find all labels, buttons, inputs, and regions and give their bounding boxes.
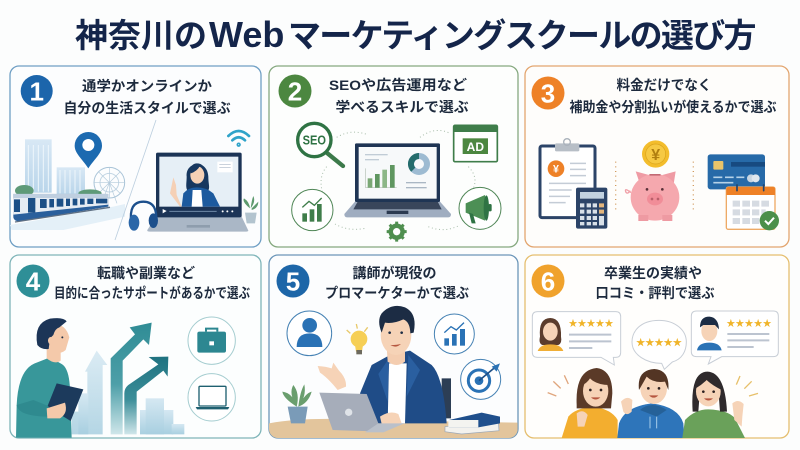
heading 4 bbox=[54, 265, 250, 301]
heading 3: 料金だけでなく bbox=[616, 77, 712, 93]
instructor bbox=[318, 306, 451, 424]
city skyline bbox=[72, 351, 184, 434]
icon: laptop circle bbox=[188, 374, 235, 421]
heading 1 bbox=[64, 78, 230, 116]
panel 6: reviews bbox=[525, 255, 789, 438]
heading 1: 通学かオンラインか bbox=[82, 78, 212, 94]
arrow: upper growth bbox=[111, 323, 152, 434]
icon: yen coin bbox=[642, 140, 669, 168]
icon: megaphone circle bbox=[459, 187, 501, 229]
number badge 2 bbox=[278, 74, 312, 108]
title: 神奈川の bbox=[75, 17, 207, 54]
heading 6 bbox=[596, 265, 714, 301]
icon: target circle bbox=[461, 359, 501, 399]
icon: clipboard with calculator: ¥ bbox=[553, 164, 559, 176]
icon: gear bbox=[387, 222, 407, 242]
heading 5 bbox=[325, 265, 469, 301]
illustration: graduates and reviews bbox=[532, 311, 778, 438]
illustration: career paths bbox=[16, 317, 235, 438]
icon: AD window: AD bbox=[467, 140, 484, 154]
heading 1: 自分の生活スタイルで選ぶ bbox=[64, 100, 230, 116]
number badge 5 bbox=[276, 264, 310, 298]
graduate center bbox=[617, 369, 684, 438]
heading 5: プロマーケターかで選ぶ bbox=[325, 285, 469, 301]
review bubble center bbox=[632, 320, 686, 369]
graduate right bbox=[682, 372, 745, 438]
icon: wifi bbox=[228, 131, 249, 145]
illustration: laptop with online teacher bbox=[147, 153, 248, 232]
number badge 1: 1 bbox=[29, 76, 44, 106]
heading 6: 口コミ・評判で選ぶ bbox=[596, 285, 714, 301]
icon: clipboard with calculator bbox=[540, 139, 607, 229]
icon: light bulb bbox=[347, 324, 368, 354]
panel 2: skills bbox=[269, 66, 518, 247]
heading 2: SEOや広告運用など bbox=[329, 77, 467, 93]
panel 5: active marketers bbox=[269, 255, 518, 438]
icon: potted plant bbox=[243, 196, 258, 223]
icon: yen coin: ¥ bbox=[651, 147, 660, 164]
review bubble right bbox=[691, 311, 778, 364]
illustration: city and train bbox=[10, 120, 258, 240]
laptop bbox=[319, 393, 404, 432]
arrow: lower growth bbox=[124, 357, 168, 434]
person with tablet bbox=[16, 318, 83, 438]
icon: briefcase circle bbox=[188, 317, 235, 364]
heading 2 bbox=[329, 77, 468, 115]
number badge 3: 3 bbox=[541, 78, 555, 108]
icon: SEO magnifier: SEO bbox=[303, 134, 326, 148]
number badge 5: 5 bbox=[286, 266, 300, 296]
icon: potted plant bbox=[282, 384, 312, 423]
graduate left bbox=[562, 368, 618, 438]
heading 4: 目的に合ったサポートがあるかで選ぶ bbox=[54, 285, 250, 301]
title: マーケティングスクールの選び方 bbox=[288, 17, 756, 54]
heading 3: 補助金や分割払いが使えるかで選ぶ bbox=[570, 99, 776, 115]
icon: calendar with check bbox=[726, 185, 779, 230]
desk bbox=[269, 419, 518, 438]
heading 4: 転職や副業など bbox=[97, 265, 195, 281]
illustration: skills around a laptop bbox=[292, 123, 501, 242]
icon: SEO magnifier bbox=[298, 123, 343, 166]
title: Web bbox=[209, 14, 284, 55]
review bubble center: ★★★★★ bbox=[636, 337, 682, 347]
review bubble right: ★★★★★ bbox=[726, 318, 772, 328]
icon: map pin bbox=[75, 132, 102, 168]
heading 5: 講師が現役の bbox=[352, 265, 436, 281]
heading 6: 卒業生の実績や bbox=[604, 265, 702, 281]
panel 1: commute or online bbox=[10, 66, 261, 247]
laptop with charts bbox=[344, 143, 451, 217]
icon: chart circle bbox=[434, 314, 474, 354]
icon: headphones bbox=[129, 202, 158, 231]
heading 2: 学べるスキルで選ぶ bbox=[336, 99, 468, 115]
illustration: instructor at desk bbox=[269, 306, 518, 438]
excitement lines bbox=[548, 375, 758, 396]
icon: growth chart circle bbox=[292, 189, 333, 231]
number badge 4 bbox=[16, 264, 50, 298]
number badge 3 bbox=[532, 76, 564, 110]
heading 3 bbox=[570, 77, 776, 115]
number badge 6: 6 bbox=[541, 266, 555, 296]
panel 4: support for goals bbox=[10, 255, 261, 438]
icon: AD window bbox=[454, 125, 497, 162]
icon: user circle bbox=[287, 311, 332, 356]
review bubble left: ★★★★★ bbox=[568, 319, 614, 329]
books bbox=[445, 413, 500, 434]
icon: piggy bank bbox=[625, 171, 679, 221]
panel 3: cost bbox=[525, 66, 789, 247]
review bubble left bbox=[532, 312, 621, 365]
icon: credit card bbox=[708, 154, 765, 189]
number badge 1 bbox=[21, 75, 53, 107]
number badge 2: 2 bbox=[288, 76, 302, 106]
number badge 4: 4 bbox=[26, 266, 41, 296]
illustration: money options bbox=[540, 139, 779, 230]
number badge 6 bbox=[532, 264, 564, 298]
